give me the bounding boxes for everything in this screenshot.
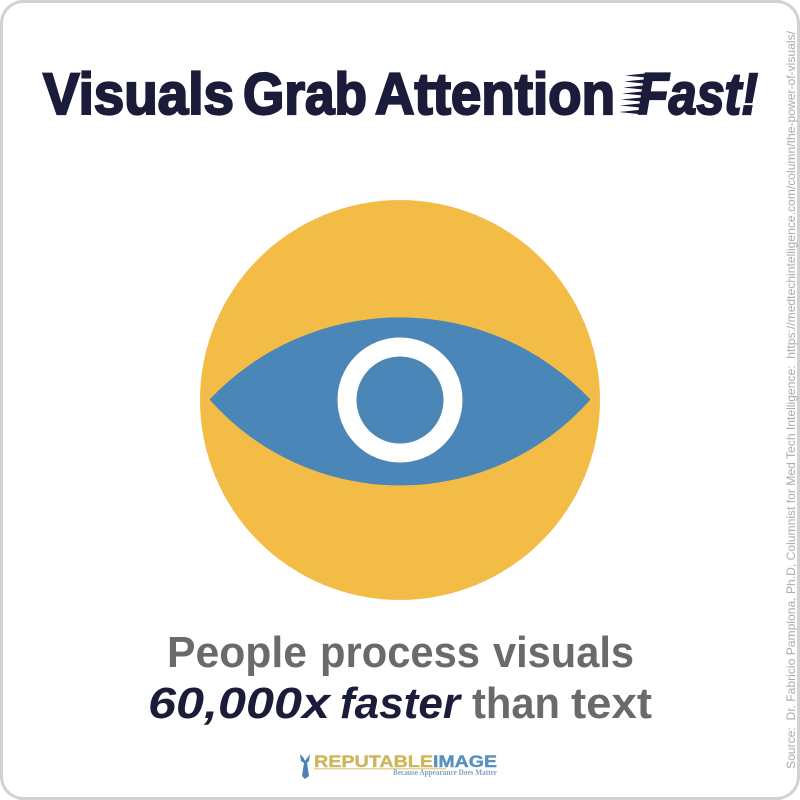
caption text: visuals [493,628,634,677]
title: Grab [243,62,367,127]
logo: Reputable Image [300,752,497,779]
caption text: faster [340,679,463,728]
caption text: than [472,679,560,728]
icon: necktie [300,754,310,779]
title [43,62,758,127]
logo wordmark: REPUTABLE [314,752,433,771]
logo: Reputable Image: IMAGE [433,752,497,771]
source note: Source: Dr. Fabricio Pamplona, Ph.D, Columnist for Med Tech Intelligence: https://medtechintelligence.com/column/the-power-of-visuals/ [784,30,798,769]
title: Attention [375,62,615,127]
caption text [148,628,652,728]
title: Fast! [638,62,758,127]
caption text: People [167,628,307,677]
icon: eye in yellow circle [200,200,600,600]
title: Visuals [43,62,234,127]
logo tagline: Because Appearance Does Matter [393,768,497,777]
caption text: 60,000x [148,679,332,728]
caption text: process [320,628,480,677]
icon: speed lines [619,74,645,114]
caption text: text [571,679,652,728]
